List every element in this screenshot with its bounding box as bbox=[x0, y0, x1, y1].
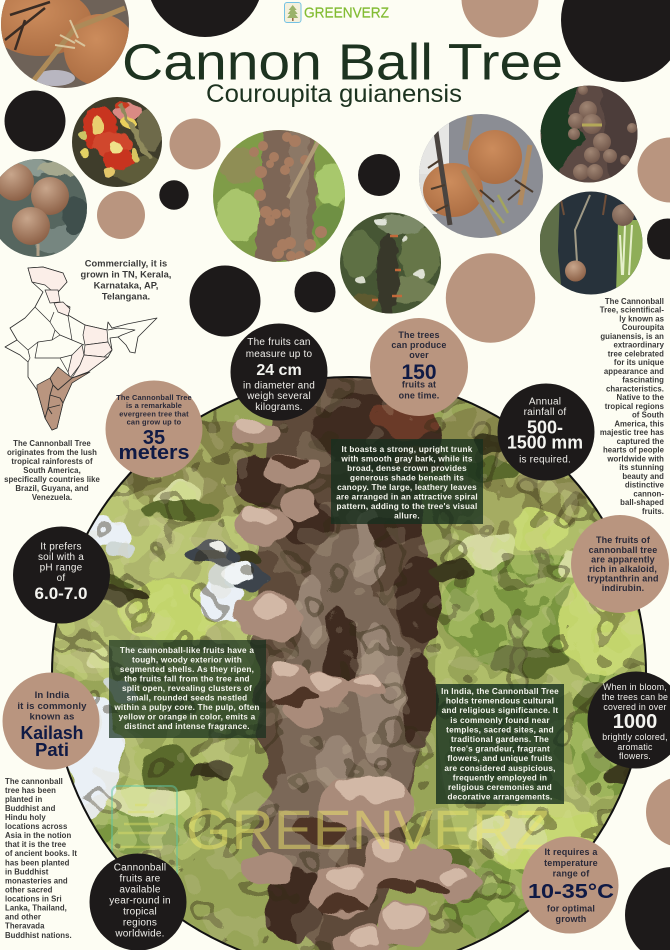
text box: religious significance bbox=[436, 684, 564, 804]
text: right description: appearance and bbox=[604, 367, 664, 376]
text: left description: Buddhist nations. bbox=[5, 931, 72, 940]
watermark logo GREENVERZ bbox=[112, 786, 550, 881]
text: right description: ly known as bbox=[619, 314, 665, 324]
callout: 35 meters bbox=[106, 380, 202, 478]
text: right description: for its unique bbox=[614, 358, 665, 367]
photo: tree trunk with fruits bbox=[212, 130, 348, 262]
callout: 150 fruits: The trees bbox=[398, 330, 440, 340]
callout: soil pH bbox=[13, 526, 110, 624]
callout: Kailash Pati: Pati bbox=[35, 739, 69, 760]
text: left description: Buddhist and bbox=[5, 804, 56, 813]
text: right description: of South bbox=[632, 411, 664, 420]
text: left description: Hindu holy bbox=[5, 813, 46, 822]
photo: three round fruits bbox=[0, 158, 88, 258]
text: left description: Asia in the notion bbox=[5, 831, 71, 840]
text: right description: Couroupita bbox=[622, 323, 665, 332]
text: left description: planted in bbox=[5, 795, 43, 804]
text box: fruits: The cannonball-like fruits have a bbox=[120, 646, 254, 655]
text box: religious significance: religious ceremonies and bbox=[448, 783, 552, 792]
text: left description: has been planted bbox=[5, 858, 70, 868]
text: left description: in Buddhist bbox=[5, 868, 49, 876]
text: origin bbox=[4, 439, 101, 502]
callout: 24 cm fruits: 24 cm bbox=[256, 362, 302, 379]
text: commercially grown: Commercially, it is bbox=[85, 258, 167, 268]
text: commercially grown bbox=[81, 258, 171, 302]
text box: religious significance: flowers, and unique fruits bbox=[447, 754, 553, 763]
logo wordmark: GREENVERZ bbox=[304, 6, 389, 22]
callout: 1000 flowers: the trees can be bbox=[602, 692, 668, 702]
callout: 35 meters: is a remarkable bbox=[126, 401, 182, 410]
icon: logo tree bbox=[284, 2, 301, 22]
watermark logo GREENVERZ: GREENVERZ bbox=[186, 798, 550, 861]
callout: 1000 flowers bbox=[588, 672, 670, 768]
callout: rainfall bbox=[498, 384, 594, 480]
text box: trunk and crown: It boasts a strong, upright trunk bbox=[342, 445, 473, 454]
text: right description: Native to the bbox=[617, 393, 665, 402]
text: origin: Brazil, Guyana, and bbox=[15, 484, 89, 493]
text box: fruits: yellow or orange in color, emits a bbox=[119, 712, 256, 722]
large circular tree illustration bbox=[53, 378, 645, 950]
callout: 24 cm fruits: in diameter and bbox=[243, 380, 315, 392]
logo bbox=[284, 2, 389, 22]
text: right description: cannon- bbox=[633, 490, 664, 498]
text: left description: tree has been bbox=[5, 786, 56, 795]
callout: 35 meters: The Cannonball Tree bbox=[116, 393, 192, 402]
text box: fruits: split open, revealing clusters of bbox=[122, 684, 252, 693]
text box: trunk and crown: allure. bbox=[394, 512, 420, 520]
text: origin: specifically countries like bbox=[4, 475, 101, 484]
text box: trunk and crown: pattern, adding to the tree's visual bbox=[337, 502, 477, 511]
callout: temperature: for optimal bbox=[547, 904, 595, 914]
text box: religious significance: is commonly found near bbox=[450, 716, 550, 725]
callout: 35 meters: meters bbox=[118, 442, 190, 464]
callout: 150 fruits: can produce bbox=[391, 340, 447, 350]
callout: alkaloid: indirubin. bbox=[602, 583, 644, 593]
text box: fruits bbox=[109, 640, 266, 738]
callout: year-round fruits: Cannonball bbox=[114, 862, 166, 874]
callout: 24 cm fruits: The fruits can bbox=[247, 337, 311, 348]
text: right description: captured the bbox=[617, 437, 665, 446]
callout: alkaloid: tryptanthrin and bbox=[587, 574, 659, 584]
foliage highlight patches bbox=[55, 443, 645, 924]
callout: alkaloid: rich in alkaloid, bbox=[589, 564, 657, 574]
text box: religious significance: decorative arrangements. bbox=[448, 793, 552, 802]
text box: religious significance: are considered auspicious, bbox=[444, 764, 556, 773]
callout: 150 fruits: over bbox=[409, 350, 429, 360]
callout: soil pH: pH range bbox=[40, 562, 83, 574]
text: left description: and other bbox=[5, 912, 41, 922]
text box: religious significance: temples, sacred sites, and bbox=[446, 725, 554, 734]
text box: fruits: within a pulpy core. The pulp, often bbox=[113, 703, 260, 712]
callout: soil pH: It prefers bbox=[40, 542, 82, 552]
callout: 1000 flowers: brightly colored, bbox=[602, 732, 668, 742]
text box: trunk and crown: with smooth gray bark, while its bbox=[340, 454, 473, 464]
callout: soil pH: soil with a bbox=[38, 552, 84, 563]
map of India with highlighted southern states bbox=[5, 267, 157, 430]
text box: fruits: distinct and intense fragrance. bbox=[124, 722, 250, 731]
text: right description: worldwide with bbox=[606, 454, 664, 464]
text box: fruits: segmented shells. As they ripen, bbox=[120, 665, 254, 674]
text: right description: tropical regions bbox=[605, 402, 665, 411]
callout: temperature: 10-35°C bbox=[528, 881, 614, 903]
text: origin: originates from the lush bbox=[7, 448, 97, 457]
subtitle: Couroupita guianensis bbox=[206, 80, 462, 108]
callout: 1000 flowers: 1000 bbox=[613, 711, 657, 733]
callout: rainfall: rainfall of bbox=[524, 407, 566, 418]
text box: fruits: tough, woody exterior with bbox=[132, 656, 242, 664]
callout: 24 cm fruits: weigh several bbox=[246, 391, 311, 402]
callout: 35 meters: can grow up to bbox=[127, 418, 182, 426]
text box: religious significance: holds tremendous cultural bbox=[446, 697, 554, 706]
text: left description: locations in Sri bbox=[5, 894, 62, 904]
text: left description: The cannonball bbox=[5, 777, 63, 786]
photo: hanging fruit on trunk bbox=[540, 191, 644, 295]
callout: 150 fruits: one time. bbox=[399, 390, 439, 400]
callout: alkaloid bbox=[571, 515, 669, 613]
callout: temperature: range of bbox=[553, 868, 590, 878]
text: left description: that it is the tree bbox=[5, 840, 67, 849]
text: right description: extraordinary bbox=[614, 341, 665, 350]
callout: rainfall: 1500 mm bbox=[507, 432, 583, 452]
callout: year-round fruits: fruits are bbox=[120, 874, 161, 884]
callout: temperature: It requires a bbox=[545, 847, 598, 857]
text: right description: Tree, scientifical- bbox=[600, 306, 664, 315]
text box: religious significance: tree's grandeur, fragrant bbox=[450, 745, 550, 754]
callout: Kailash Pati: known as bbox=[30, 712, 74, 722]
text: left description: locations across bbox=[5, 822, 68, 831]
text box: religious significance: frequently employed in bbox=[453, 773, 547, 782]
text: left description: of ancient books. It bbox=[5, 849, 77, 858]
callout: year-round fruits: available bbox=[119, 884, 161, 896]
callout: 24 cm fruits: kilograms. bbox=[255, 402, 303, 413]
callout: 1000 flowers: aromatic bbox=[617, 742, 653, 752]
callout: 150 fruits: fruits at bbox=[402, 380, 436, 390]
text box: religious significance: In India, the Cannonball Tree bbox=[441, 687, 559, 696]
text: left description: Theravada bbox=[5, 922, 45, 930]
callout: 35 meters: evergreen tree that bbox=[119, 410, 189, 418]
callout: rainfall: Annual bbox=[529, 396, 561, 408]
text: right description: America, this bbox=[614, 420, 665, 428]
callout: Kailash Pati: In India bbox=[35, 690, 70, 701]
text: left description: Lanka, Thailand, bbox=[5, 904, 67, 912]
callout: soil pH: of bbox=[57, 573, 65, 584]
photo: cannonball fruits under thorny branch bbox=[0, 0, 136, 90]
text box: trunk and crown bbox=[331, 439, 483, 524]
callout: year-round fruits: regions bbox=[123, 918, 157, 928]
text: right description: majestic tree has bbox=[600, 428, 665, 437]
callout: 35 meters: 35 bbox=[143, 427, 165, 449]
callout: year-round fruits: tropical bbox=[123, 906, 157, 918]
text: right description: its stunning bbox=[619, 463, 664, 472]
text: right description: characteristics. bbox=[606, 384, 664, 394]
callout: year-round fruits: year-round in bbox=[109, 896, 171, 906]
title: Cannon Ball Tree bbox=[122, 34, 563, 90]
text box: trunk and crown: generous shade beneath its bbox=[350, 474, 464, 482]
text: right description: distinctive bbox=[625, 481, 665, 490]
text: commercially grown: grown in TN, Kerala, bbox=[81, 270, 171, 280]
text: right description: fascinating bbox=[622, 376, 664, 385]
text box: fruits: the fruits fall from the tree and bbox=[124, 674, 250, 684]
text: right description: ball-shaped bbox=[620, 498, 664, 507]
callout: alkaloid: cannonball tree bbox=[589, 545, 657, 555]
callout: 1000 flowers: flowers. bbox=[619, 751, 651, 761]
callout: alkaloid: The fruits of bbox=[596, 535, 651, 545]
text: right description: fruits. bbox=[642, 507, 664, 516]
callout: Kailash Pati: it is commonly bbox=[17, 701, 87, 712]
callout: Kailash Pati: Kailash bbox=[20, 722, 84, 743]
callout: 150 fruits: 150 bbox=[401, 361, 437, 384]
text: origin: South America, bbox=[23, 466, 81, 475]
text box: trunk and crown: canopy. The large, leathery leaves bbox=[337, 483, 477, 492]
text: right description: tree celebrated bbox=[608, 350, 664, 358]
outline of tree circle bbox=[52, 377, 646, 950]
text box: trunk and crown: are arranged in an attractive spiral bbox=[336, 492, 478, 502]
text: origin: The Cannonball Tree bbox=[13, 439, 91, 448]
callout: 24 cm fruits bbox=[230, 324, 328, 420]
text: left description: other sacred bbox=[5, 886, 53, 894]
callout: soil pH: 6.0-7.0 bbox=[35, 584, 87, 603]
callout: 1000 flowers: covered in over bbox=[603, 702, 667, 712]
text: right description: hearts of people bbox=[603, 446, 665, 455]
callout: temperature bbox=[522, 836, 618, 934]
text: left description bbox=[5, 777, 77, 940]
text: right description: guianensis, is an bbox=[600, 332, 664, 341]
text box: trunk and crown: broad, dense crown provides bbox=[347, 464, 467, 473]
callout: year-round fruits: worldwide. bbox=[114, 928, 165, 940]
text: right description: beauty and bbox=[622, 472, 664, 481]
text box: religious significance: traditional gardens. The bbox=[451, 735, 549, 744]
text: right description bbox=[600, 297, 665, 516]
callout: 150 fruits bbox=[370, 318, 468, 416]
photo: cannonball flowers bbox=[72, 97, 162, 187]
photo: fruits against dark foliage bbox=[540, 85, 640, 184]
callout: year-round fruits bbox=[90, 854, 186, 950]
text box: religious significance: and religious significance. It bbox=[442, 706, 558, 715]
text: commercially grown: Karnataka, AP, bbox=[94, 280, 158, 290]
text: origin: Venezuela. bbox=[32, 493, 72, 502]
callout: 1000 flowers: When in bloom, bbox=[603, 682, 667, 692]
callout: temperature: growth bbox=[556, 914, 586, 924]
text: left description: monasteries and bbox=[5, 876, 68, 886]
callout: Kailash Pati bbox=[2, 672, 100, 770]
text: commercially grown: Telangana. bbox=[102, 292, 150, 302]
photo: tree canopy bbox=[340, 212, 442, 317]
callout: 24 cm fruits: measure up to bbox=[246, 349, 312, 360]
callout: rainfall: 500- bbox=[527, 418, 563, 438]
callout: alkaloid: are apparently bbox=[591, 554, 655, 564]
text box: fruits: small, rounded seeds nestled bbox=[127, 694, 247, 702]
text: origin: tropical rainforests of bbox=[11, 457, 93, 466]
fruit clusters bbox=[231, 422, 482, 950]
callout: temperature: temperature bbox=[544, 858, 598, 868]
text: right description: The Cannonball bbox=[605, 297, 664, 306]
callout: rainfall: is required. bbox=[519, 454, 571, 466]
photo: fruit on branches against bark bbox=[419, 114, 543, 238]
